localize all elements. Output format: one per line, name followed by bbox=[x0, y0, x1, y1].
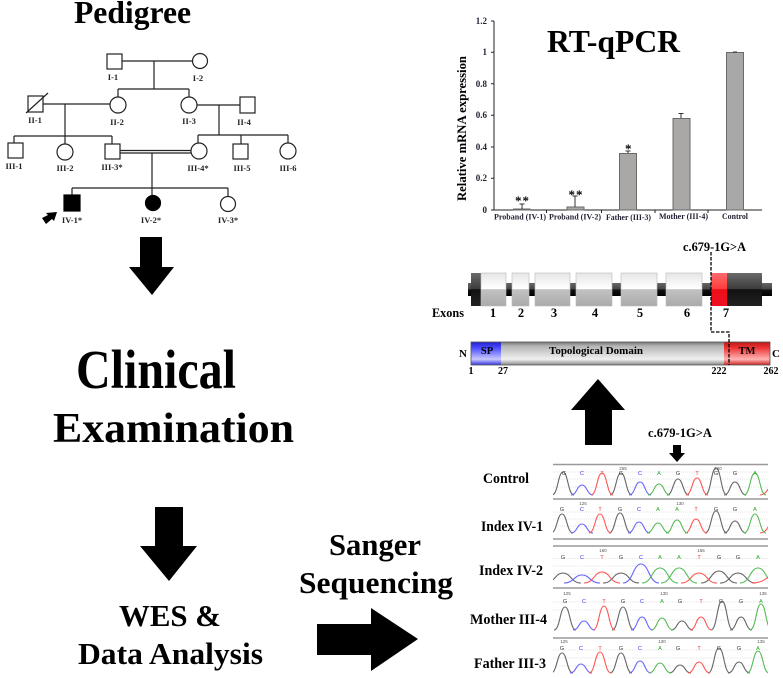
category labels: Father (III-3) bbox=[606, 212, 651, 222]
pedigree chart: II-3 bbox=[182, 116, 196, 126]
heading: WES and Data Analysis: WES & bbox=[119, 598, 221, 633]
trace: Index IV-2: G bbox=[561, 555, 565, 561]
trace: Father III-3: G bbox=[560, 646, 564, 652]
trace: Mother III-4: A bbox=[660, 599, 664, 605]
trace: Father III-3: T bbox=[697, 646, 701, 652]
category labels bbox=[494, 211, 749, 222]
trace: Mother III-4: C bbox=[640, 599, 644, 605]
pedigree chart bbox=[5, 54, 297, 225]
protein domain diagram: 27 bbox=[498, 366, 508, 377]
category labels: Proband (IV-1) bbox=[494, 212, 546, 222]
exon labels: 5 bbox=[637, 306, 643, 320]
pedigree chart: I-1 bbox=[108, 72, 118, 82]
y axis labels: 0.2 bbox=[476, 173, 488, 183]
protein domain diagram: 1 bbox=[468, 366, 474, 377]
trace: Index IV-1: G bbox=[560, 507, 564, 513]
pedigree chart: IV-2* bbox=[141, 215, 161, 225]
trace: Mother III-4: G bbox=[719, 599, 723, 605]
trace: Index IV-1: T bbox=[598, 507, 602, 513]
pedigree chart: III-3* bbox=[101, 162, 123, 172]
heading: WES and Data Analysis bbox=[78, 598, 263, 671]
sequencing chromatograms bbox=[470, 464, 776, 673]
pedigree chart: III-2 bbox=[56, 163, 74, 173]
dashed line linking mutation to protein bbox=[711, 252, 729, 365]
exon labels: 6 bbox=[684, 306, 690, 320]
exon labels: 1 bbox=[490, 306, 496, 320]
trace: Control: G bbox=[714, 471, 718, 477]
heading: Sanger Sequencing: Sequencing bbox=[299, 565, 453, 600]
trace: Father III-3: C bbox=[579, 646, 583, 652]
arrow: sequencing to protein diagram bbox=[571, 379, 625, 445]
trace: Father III-3: 130 bbox=[658, 639, 666, 644]
mutation label: c.679-1G>A bbox=[683, 240, 746, 254]
title: RT-qPCR: RT-qPCR bbox=[547, 23, 681, 59]
trace: Index IV-2: 160 bbox=[599, 548, 607, 553]
exon labels: 4 bbox=[592, 306, 599, 320]
y axis labels: 0.8 bbox=[476, 79, 488, 89]
trace: Index IV-1: A bbox=[753, 507, 757, 513]
protein domain diagram: TM bbox=[739, 346, 756, 357]
trace: Index IV-1: C bbox=[580, 507, 584, 513]
exon labels bbox=[432, 306, 729, 320]
significance stars: * bbox=[625, 141, 632, 156]
trace: Index IV-1: T bbox=[694, 507, 698, 513]
pedigree chart: II-2 bbox=[110, 117, 124, 127]
trace: Control bbox=[483, 466, 768, 495]
trace: Index IV-2: T bbox=[697, 555, 701, 561]
trace: Index IV-2: 165 bbox=[697, 548, 705, 553]
trace: Mother III-4: 130 bbox=[660, 591, 668, 596]
trace: Mother III-4: T bbox=[699, 599, 703, 605]
y axis labels: 1.2 bbox=[476, 16, 488, 26]
bars bbox=[514, 52, 744, 210]
significance stars bbox=[515, 141, 632, 208]
category labels: Control bbox=[722, 211, 749, 221]
pedigree chart: IV-3* bbox=[218, 215, 238, 225]
trace: Mother III-4: G bbox=[678, 599, 682, 605]
trace: Mother III-4: G bbox=[563, 599, 567, 605]
trace: Father III-3: 125 bbox=[560, 639, 568, 644]
panel separators bbox=[553, 464, 768, 638]
trace: Mother III-4: T bbox=[602, 599, 606, 605]
protein domain diagram: 222 bbox=[712, 366, 726, 377]
trace: Control: T bbox=[695, 471, 699, 477]
trace: Father III-3: G bbox=[619, 646, 623, 652]
trace: Control: T bbox=[600, 471, 604, 477]
trace: Father III-3: T bbox=[598, 646, 602, 652]
y axis labels: 1 bbox=[482, 47, 488, 57]
trace: Control: G bbox=[562, 471, 566, 477]
protein domain diagram: SP bbox=[481, 346, 494, 357]
trace: Father III-3: Father III-3 bbox=[474, 656, 546, 672]
trace: Index IV-2: C bbox=[580, 555, 584, 561]
trace: Father III-3: A bbox=[756, 646, 760, 652]
trace: Index IV-2: G bbox=[619, 555, 623, 561]
arrow: WES to Sanger sequencing bbox=[317, 608, 418, 671]
trace: Index IV-2: A bbox=[756, 555, 760, 561]
heading: Examination: Examination bbox=[53, 406, 294, 452]
y axis labels: 0.6 bbox=[476, 110, 488, 120]
trace: Control: A bbox=[657, 471, 661, 477]
trace: Index IV-2: A bbox=[677, 555, 681, 561]
trace: Father III-3: C bbox=[638, 646, 642, 652]
trace: Control: G bbox=[619, 471, 623, 477]
trace: Control: G bbox=[733, 471, 737, 477]
exon labels: 3 bbox=[551, 306, 557, 320]
trace: Index IV-1: G bbox=[714, 507, 718, 513]
significance stars: ** bbox=[568, 187, 584, 202]
y axis labels: 0.4 bbox=[476, 142, 488, 152]
trace: Father III-3: G bbox=[717, 646, 721, 652]
trace: Father III-3 bbox=[474, 639, 769, 673]
trace: Index IV-2: C bbox=[639, 555, 643, 561]
significance stars: ** bbox=[515, 193, 530, 208]
trace: Mother III-4: A bbox=[759, 599, 763, 605]
trace: Index IV-1: A bbox=[675, 507, 679, 513]
pedigree chart: II-1 bbox=[28, 115, 42, 125]
trace: Index IV-1: C bbox=[637, 507, 641, 513]
y axis labels: 0 bbox=[482, 205, 488, 215]
heading: Sanger Sequencing bbox=[299, 527, 453, 600]
trace: Index IV-2: G bbox=[736, 555, 740, 561]
trace: Mother III-4: 125 bbox=[563, 591, 571, 596]
gene diagram: exon structure bbox=[432, 240, 772, 320]
pedigree chart: II-4 bbox=[237, 117, 252, 127]
trace: Control: 260 bbox=[714, 466, 722, 471]
pedigree chart: I-2 bbox=[193, 73, 203, 83]
trace: Index IV-2 bbox=[479, 548, 776, 583]
trace: Index IV-2: Index IV-2 bbox=[479, 563, 543, 579]
heading: Sanger Sequencing: Sanger bbox=[329, 527, 421, 562]
arrow: pedigree to clinical examination bbox=[129, 237, 174, 295]
bar chart: RT-qPCR relative mRNA expression bbox=[454, 16, 762, 222]
trace: Index IV-1 bbox=[481, 501, 768, 535]
y axis title: Relative mRNA expression bbox=[454, 55, 469, 201]
trace: Mother III-4 bbox=[470, 591, 772, 630]
trace: Father III-3: G bbox=[737, 646, 741, 652]
axes bbox=[491, 21, 762, 213]
exon labels: 2 bbox=[518, 306, 524, 320]
pedigree chart: III-6 bbox=[279, 163, 297, 173]
trace: Father III-3: G bbox=[676, 646, 680, 652]
trace: Index IV-1: A bbox=[656, 507, 660, 513]
trace: Index IV-1: 125 bbox=[579, 501, 587, 506]
pedigree chart: III-5 bbox=[233, 163, 251, 173]
pedigree chart: III-4* bbox=[187, 163, 209, 173]
pedigree chart: IV-1* bbox=[62, 215, 82, 225]
trace: Mother III-4: 135 bbox=[759, 591, 767, 596]
y axis labels bbox=[476, 16, 488, 215]
heading: WES and Data Analysis: Data Analysis bbox=[78, 636, 263, 671]
trace: Mother III-4: G bbox=[621, 599, 625, 605]
icon: mutation position arrow bbox=[669, 445, 685, 462]
trace: Index IV-1: G bbox=[618, 507, 622, 513]
trace: Index IV-1: G bbox=[733, 507, 737, 513]
trace: Index IV-1: 130 bbox=[676, 501, 684, 506]
trace: Father III-3: 135 bbox=[757, 639, 765, 644]
arrow: clinical examination to WES bbox=[140, 507, 197, 581]
trace: Control: 255 bbox=[619, 466, 627, 471]
icon: proband arrow bbox=[42, 212, 57, 224]
trace: Control: G bbox=[676, 471, 680, 477]
protein domain diagram: N bbox=[459, 348, 467, 360]
protein domain diagram: C bbox=[772, 348, 780, 360]
protein domain diagram bbox=[459, 342, 780, 377]
trace: Index IV-2: A bbox=[658, 555, 662, 561]
exon labels: 7 bbox=[723, 306, 729, 320]
trace: Control: Control bbox=[483, 471, 529, 487]
trace: Father III-3: A bbox=[658, 646, 662, 652]
error bars bbox=[520, 52, 737, 209]
pedigree chart: III-1 bbox=[5, 161, 23, 171]
protein domain diagram: 262 bbox=[764, 366, 778, 377]
exon labels: Exons bbox=[432, 306, 464, 320]
trace: Mother III-4: C bbox=[582, 599, 586, 605]
trace: Mother III-4: G bbox=[739, 599, 743, 605]
trace: Index IV-1: Index IV-1 bbox=[481, 519, 543, 535]
trace: Mother III-4: Mother III-4 bbox=[470, 612, 547, 628]
category labels: Proband (IV-2) bbox=[549, 212, 601, 222]
trace: Control: C bbox=[638, 471, 642, 477]
protein domain diagram: Topological Domain bbox=[549, 346, 643, 357]
category labels: Mother (III-4) bbox=[659, 211, 708, 221]
trace: Control: C bbox=[580, 471, 584, 477]
trace: Index IV-2: G bbox=[717, 555, 721, 561]
trace: Control: A bbox=[753, 471, 757, 477]
trace: Index IV-2: T bbox=[600, 555, 604, 561]
mutation label above chromatograms: c.679-1G>A bbox=[648, 426, 712, 440]
heading: Clinical: Clinical bbox=[76, 339, 236, 400]
